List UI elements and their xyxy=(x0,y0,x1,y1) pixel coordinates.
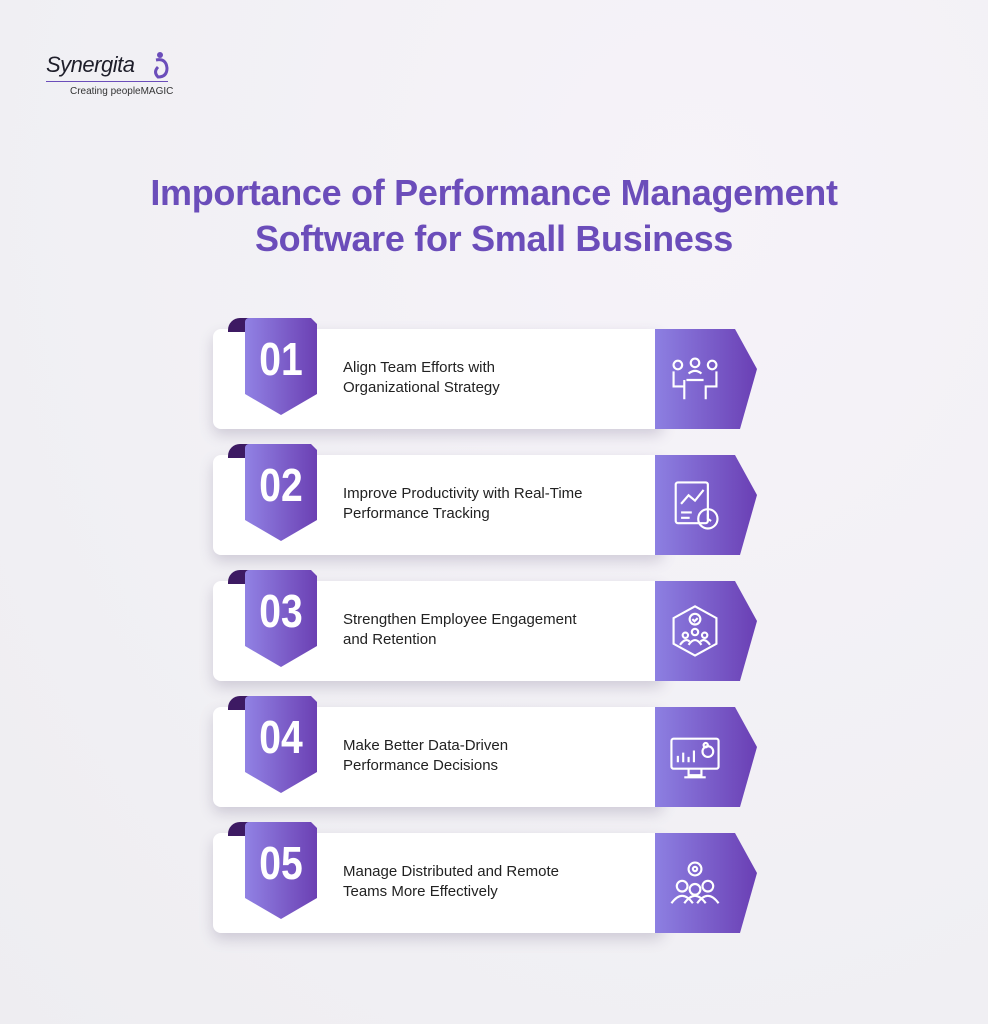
row 3 xyxy=(207,570,757,693)
row 1: Organizational Strategy xyxy=(343,379,500,396)
title: Importance of Performance Management xyxy=(150,172,838,213)
logo: Creating peopleMAGIC xyxy=(70,86,173,97)
row 2: Improve Productivity with Real-Time xyxy=(343,485,583,502)
logo: Synergita xyxy=(46,52,134,77)
title xyxy=(150,172,838,259)
icon: chart clock xyxy=(674,481,719,530)
icon: remote team xyxy=(670,862,720,904)
row 5: Manage Distributed and Remote xyxy=(343,863,559,880)
row 4: Make Better Data-Driven xyxy=(343,737,508,754)
row 5 xyxy=(207,822,757,945)
icon: engagement xyxy=(672,605,718,657)
row 2 xyxy=(207,444,757,567)
row 1: 01 xyxy=(259,333,303,385)
row 4 xyxy=(207,696,757,819)
row 3: and Retention xyxy=(343,631,436,648)
logo xyxy=(46,52,173,97)
row 5: 05 xyxy=(259,837,303,889)
row 3: 03 xyxy=(259,585,303,637)
icon: logo mark xyxy=(154,52,168,78)
row 1: Align Team Efforts with xyxy=(343,359,495,376)
row 3: Strengthen Employee Engagement xyxy=(343,611,576,628)
icon: monitor data xyxy=(670,738,720,778)
row 2: 02 xyxy=(259,459,303,511)
row 2: Performance Tracking xyxy=(343,505,490,522)
row 1 xyxy=(207,318,757,441)
icon: meeting xyxy=(672,358,718,400)
row 5: Teams More Effectively xyxy=(343,883,498,900)
row 4: Performance Decisions xyxy=(343,757,498,774)
row 4: 04 xyxy=(259,711,303,763)
title: Software for Small Business xyxy=(255,218,733,259)
